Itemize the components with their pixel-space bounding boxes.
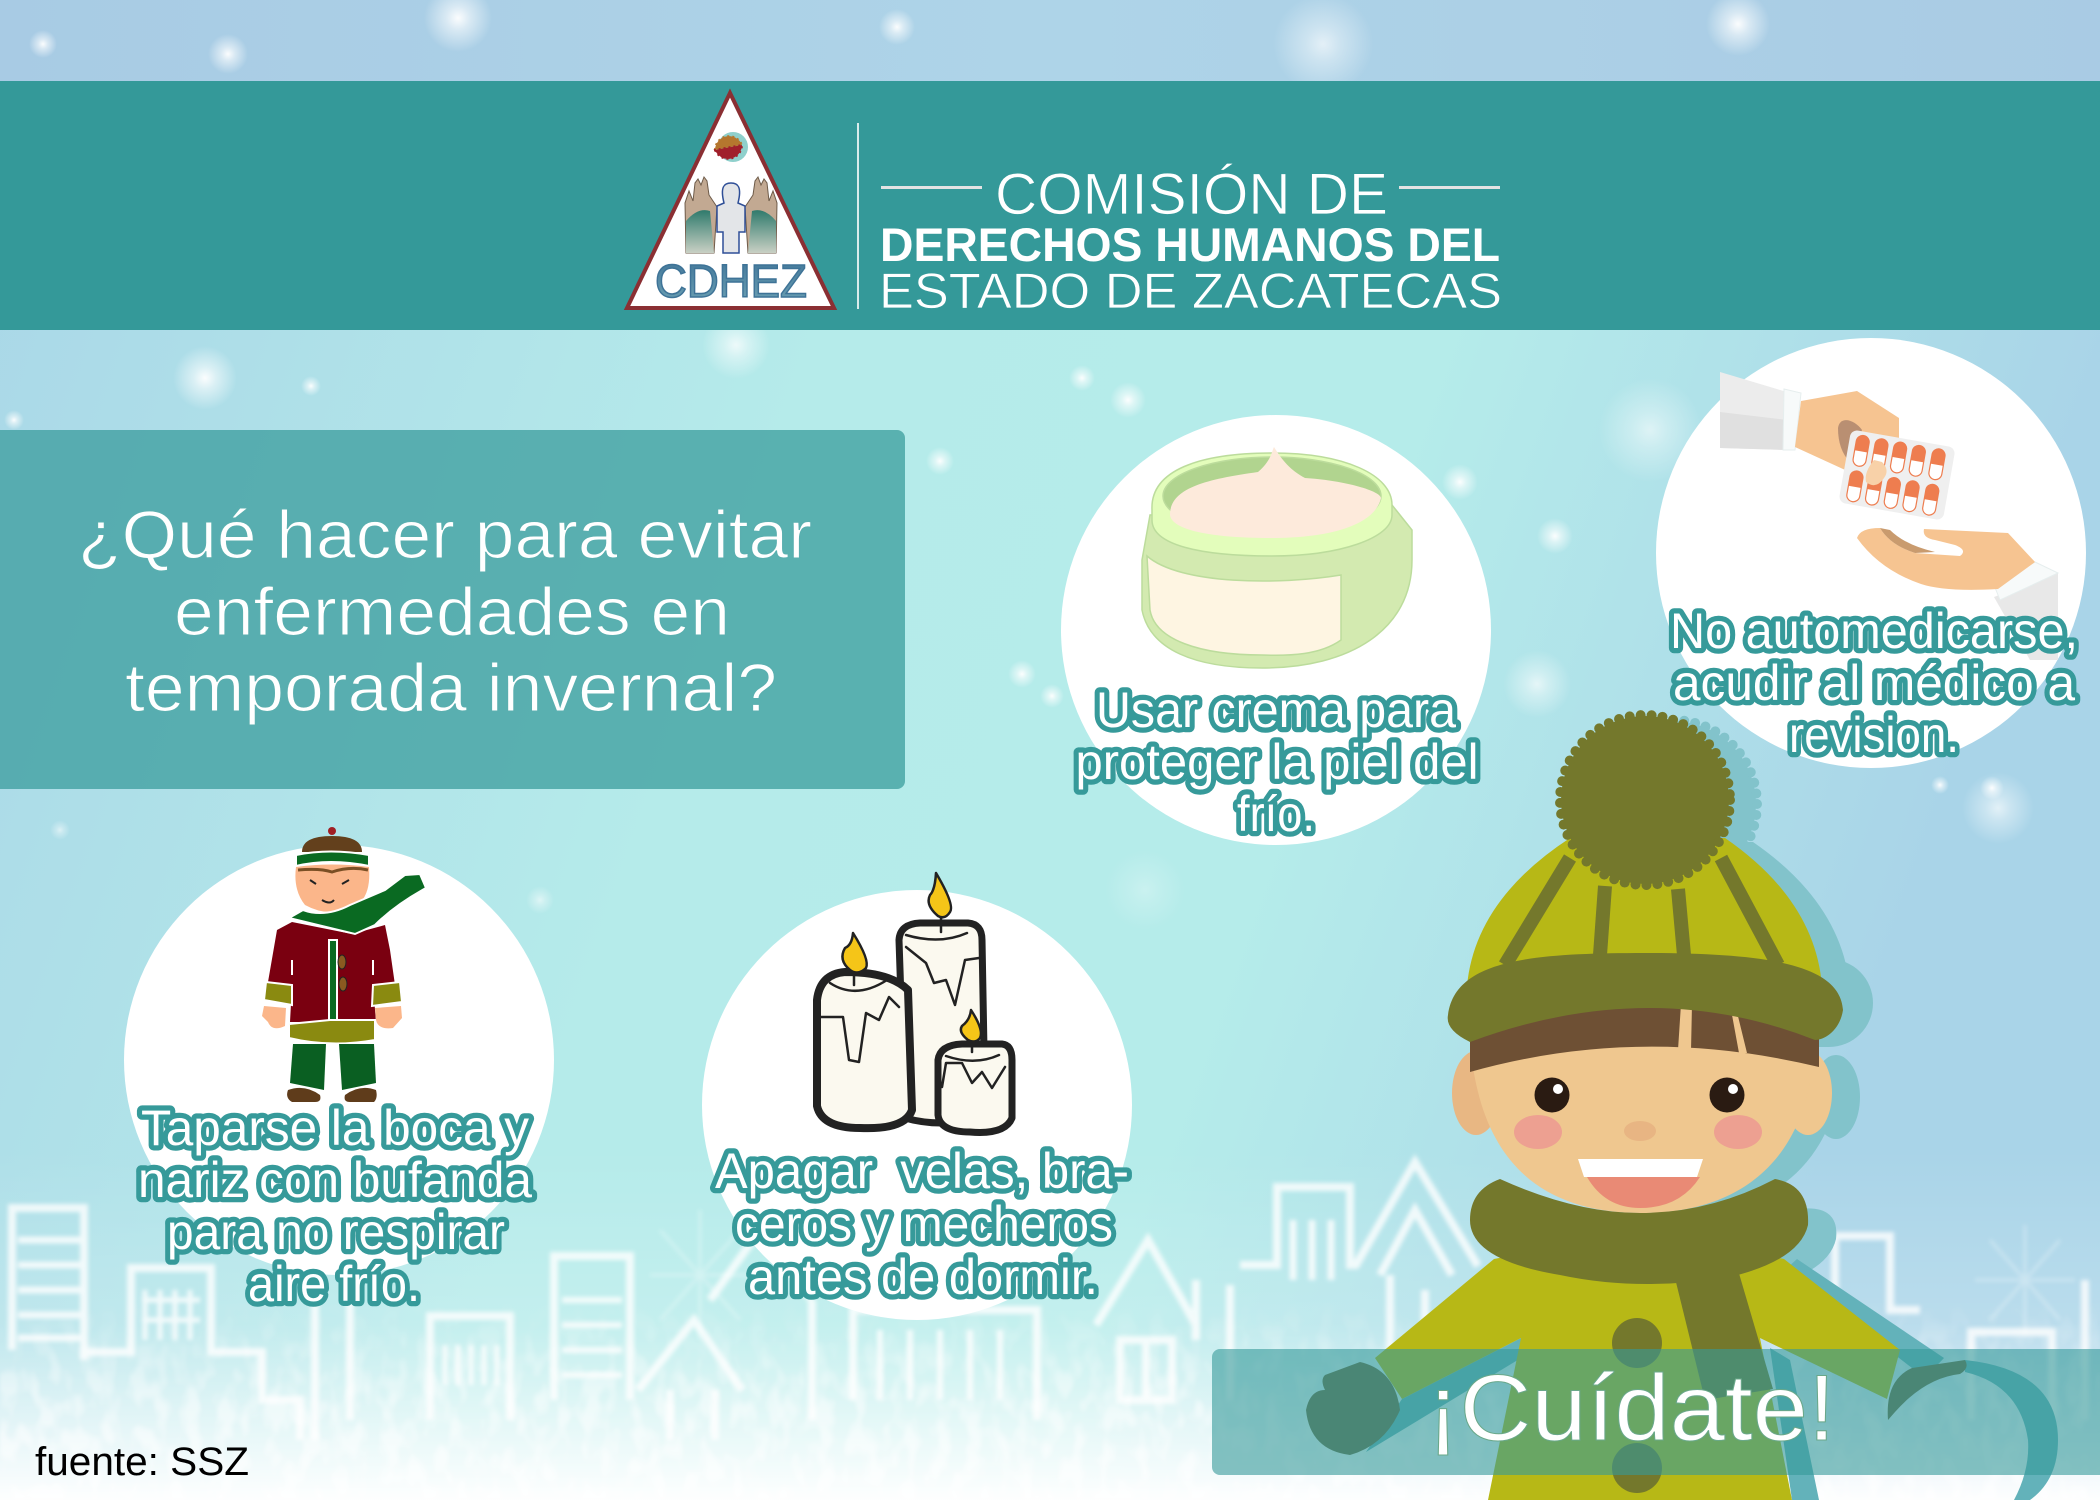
label: candles: Apagar velas, bra- (715, 1143, 1129, 1199)
panel: Cuídate banner (1212, 1349, 2100, 1475)
background: snow glows (4, 0, 2034, 930)
label: scarf: Taparse la boca y (141, 1100, 529, 1156)
background: snow ground (0, 1236, 2100, 1500)
panel: question (0, 430, 905, 789)
background: city skyline (12, 1162, 2085, 1440)
icon: cream jar (1142, 447, 1412, 668)
label: medicine: revision. (1789, 707, 1959, 763)
label: scarf (138, 1100, 532, 1312)
child mittens (1306, 1360, 1967, 1455)
child face (1470, 1040, 1814, 1213)
label: scarf: para no respirar (167, 1204, 505, 1260)
hat pompom (1560, 715, 1730, 885)
child scarf tail (1673, 1270, 1773, 1400)
panel: question: temporada invernal? (125, 650, 777, 726)
panel: question: enfermedades en (174, 574, 730, 650)
label: cream: proteger la piel del (1076, 734, 1478, 790)
logo text: CDHEZ (655, 255, 807, 307)
panel: cream tip (1061, 415, 1491, 845)
header title: ESTADO DE ZACATECAS (879, 263, 1502, 319)
label: scarf: aire frío. (248, 1256, 420, 1312)
panel: question: ¿Qué hacer para evitar (78, 497, 812, 573)
coat shadow (1770, 1259, 1944, 1500)
child scarf (1470, 1179, 1808, 1284)
header title: DERECHOS HUMANOS DEL (880, 218, 1500, 271)
label: cream: frío. (1237, 786, 1315, 842)
label: scarf: nariz con bufanda (138, 1152, 532, 1208)
child ears (1452, 1051, 1832, 1135)
source note: fuente: SSZ (35, 1440, 249, 1484)
label: candles: ceros y mecheros (735, 1196, 1113, 1252)
header title: COMISIÓN DE (995, 162, 1388, 227)
header title (879, 162, 1502, 319)
label: medicine (1670, 603, 2078, 763)
coat buttons (1612, 1318, 1662, 1493)
panel: scarf tip (124, 827, 554, 1312)
blister pack (1838, 429, 1956, 521)
logo: CDHEZ triangle (627, 93, 834, 308)
panel: candles tip (702, 873, 1132, 1320)
child hair (1470, 1004, 1819, 1072)
icon: bundled boy (262, 827, 426, 1102)
label: medicine: No automedicarse, (1670, 603, 2078, 659)
child coat (1375, 1230, 1900, 1500)
child eyes, cheeks, nose, mouth (1514, 1078, 1762, 1208)
label: medicine: acudir al médico a (1673, 655, 2075, 711)
icon: candles (817, 873, 1012, 1132)
label: cream: Usar crema para (1096, 682, 1456, 738)
child character (1306, 715, 2058, 1500)
label: candles: antes de dormir. (748, 1249, 1098, 1305)
label: cream (1076, 682, 1478, 842)
child hat (1448, 715, 1843, 1042)
child shadow (1476, 720, 1873, 1289)
panel: medicine tip (1656, 338, 2086, 768)
icon: hands with blister pack (1720, 372, 2058, 660)
label: candles (715, 1143, 1129, 1305)
background: snowflakes (650, 1210, 2075, 1340)
panel: Cuídate banner: ¡Cuídate! (1426, 1355, 1836, 1460)
header band (0, 81, 2100, 330)
